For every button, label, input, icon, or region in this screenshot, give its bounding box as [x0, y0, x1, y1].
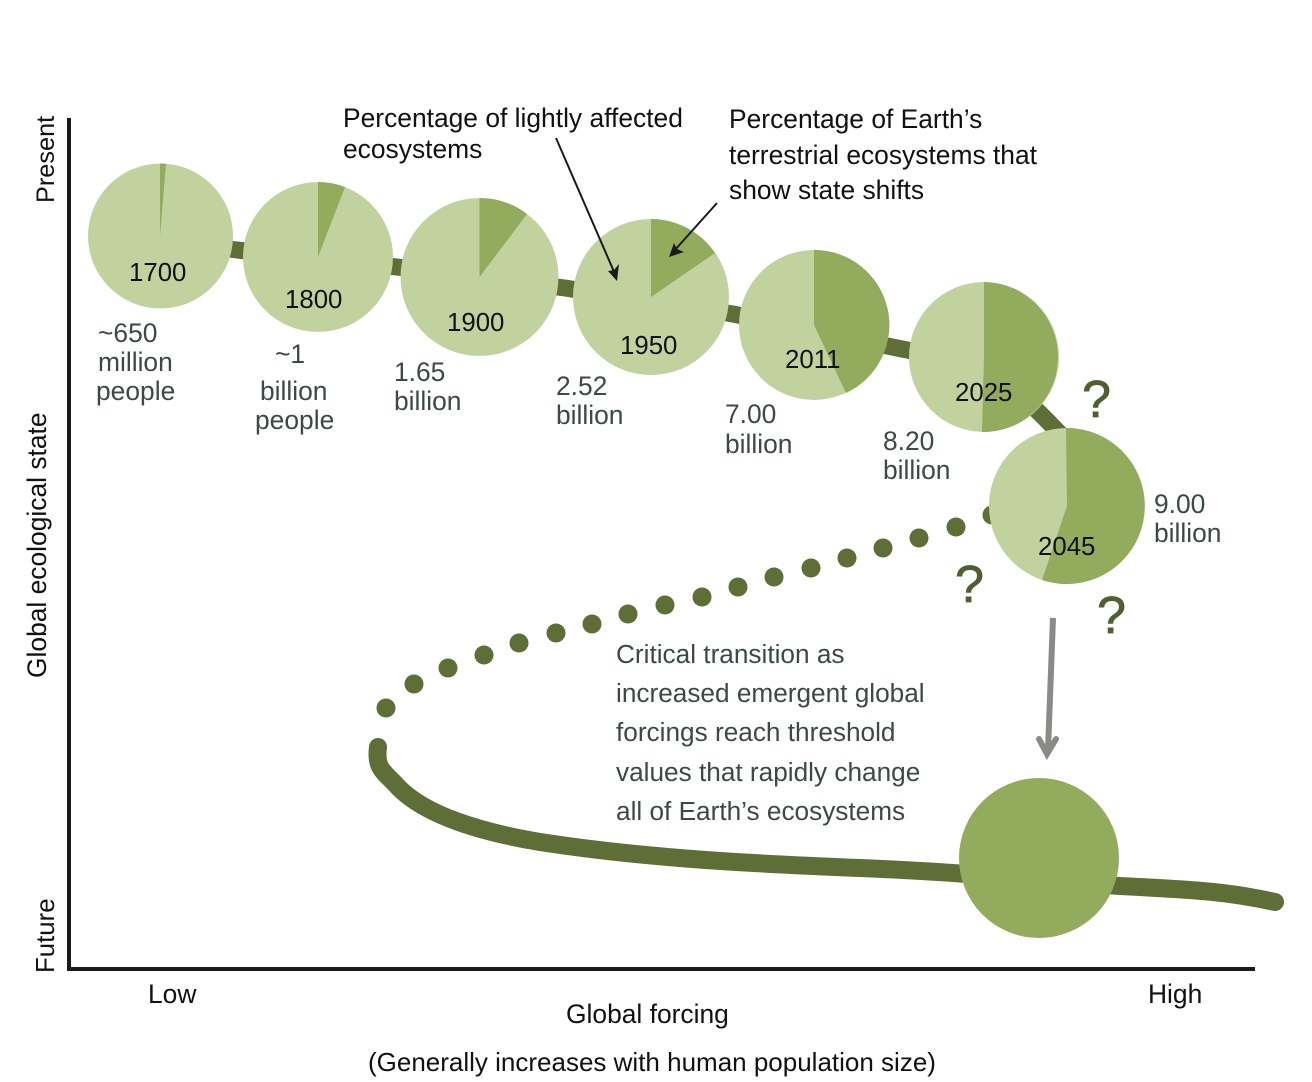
arrow: lightly affected [556, 138, 619, 281]
pie: 2045: 2045 [1038, 533, 1095, 561]
pie: 1900 [400, 198, 558, 356]
callout: lightly affected ecosystems: ecosystems [343, 134, 482, 164]
x axis note: (Generally increases with human population size) [368, 1047, 936, 1077]
x axis label: Low: Low [148, 979, 197, 1009]
upper trajectory line [160, 240, 1062, 436]
population: ~650 million people: million [98, 347, 173, 377]
population: 1.65 billion: 1.65 [394, 357, 445, 387]
pie: 1800 [243, 182, 393, 332]
pie: 2011: 2011 [785, 346, 840, 374]
callout: state shifts: Percentage of Earth’s [729, 104, 982, 134]
pie: 1700 [88, 163, 233, 308]
population: ~650 million people: ~650 [98, 318, 157, 348]
x axis label: High: High [1148, 979, 1202, 1009]
y axis label: Present: Present [32, 116, 60, 203]
population: 2.52 billion: 2.52 [556, 371, 607, 401]
critical transition text: values that rapidly change [616, 757, 920, 787]
critical transition text: all of Earth’s ecosystems [616, 796, 905, 826]
future state circle [959, 778, 1119, 938]
dotted critical transition path [376, 506, 1002, 718]
population: 9.00 billion: 9.00 [1154, 489, 1205, 519]
pie: 1950: 1950 [620, 332, 677, 360]
population: ~1 billion people: ~1 [275, 339, 305, 369]
population: ~1 billion people: billion [260, 376, 327, 406]
question marks: ? [955, 556, 984, 614]
population: 8.20 billion: billion [883, 455, 950, 485]
y axis label: Global ecological state: Global ecological state [22, 412, 52, 678]
callout: lightly affected ecosystems: Percentage of lightly affected [343, 103, 683, 133]
question marks: ? [1097, 587, 1126, 645]
population: 7.00 billion: billion [725, 429, 792, 459]
population: 2.52 billion: billion [556, 400, 623, 430]
pie: 2025: 2025 [955, 379, 1012, 407]
arrow: critical transition [1039, 618, 1056, 754]
arrow: state shifts [669, 203, 717, 257]
pie: 2045 [989, 428, 1145, 584]
pie: 1900: 1900 [447, 309, 504, 337]
pie: 2011 [739, 250, 889, 400]
y axis label: Future: Future [32, 898, 60, 973]
population: 1.65 billion: billion [394, 386, 461, 416]
population: 8.20 billion: 8.20 [883, 426, 934, 456]
population: 9.00 billion: billion [1154, 518, 1221, 548]
population: 7.00 billion: 7.00 [725, 399, 776, 429]
population: ~1 billion people: people [255, 405, 334, 435]
pie: 1700: 1700 [129, 259, 186, 287]
callout: state shifts: terrestrial ecosystems that [729, 140, 1038, 170]
pie: 1950 [573, 219, 729, 375]
callout: state shifts: show state shifts [729, 175, 924, 205]
lower trajectory line [377, 747, 1275, 902]
pie: 2025 [909, 282, 1059, 432]
population: ~650 million people: people [96, 376, 175, 406]
chart axes [69, 118, 1255, 969]
pie: 1800: 1800 [285, 286, 342, 314]
question marks: ? [1082, 371, 1111, 429]
critical transition text: forcings reach threshold [616, 717, 895, 747]
critical transition text: Critical transition as [616, 639, 844, 669]
critical transition text: increased emergent global [616, 678, 925, 708]
question marks [955, 371, 1126, 645]
x axis label: Global forcing: Global forcing [566, 999, 729, 1029]
